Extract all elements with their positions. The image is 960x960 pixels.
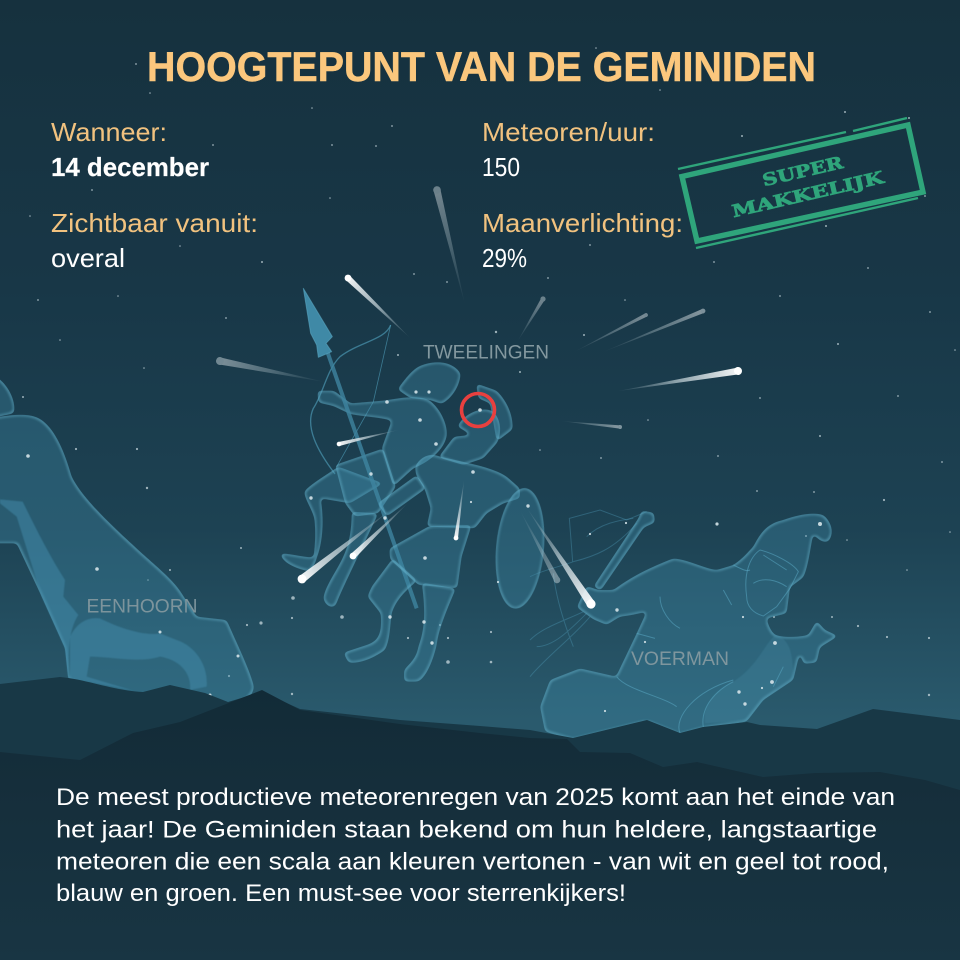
- meteor on right twin: [453, 479, 467, 541]
- stamp text first line: SUPER: [761, 153, 846, 191]
- visible from label: Zichtbaar vanuit:: [51, 208, 258, 238]
- right twin shield: [491, 486, 549, 611]
- visible from value: overal: [51, 243, 125, 273]
- moonlight value: 29%: [482, 243, 527, 273]
- whip outline: [530, 510, 647, 677]
- whip handle: [593, 511, 655, 591]
- fact: when: [51, 117, 209, 182]
- spear: [303, 288, 417, 608]
- right twin: [343, 383, 549, 682]
- description paragraph: [56, 784, 895, 907]
- right twin helmet: [438, 409, 500, 465]
- paragraph line 2: het jaar! De Geminiden staan bekend om hun heldere, langstaartige: [56, 816, 877, 844]
- constellation: Tweelingen: [280, 288, 549, 682]
- charioteer hood and face: [617, 550, 798, 733]
- meteor by shield, faint: [517, 509, 561, 584]
- paragraph line 3: meteoren die een scala aan kleuren vertonen - van wit en geel tot rood,: [56, 848, 889, 876]
- unicorn hind leg bands: [70, 618, 207, 691]
- meteor short on left twin: [336, 428, 399, 447]
- left twin kilt: [335, 448, 396, 517]
- meteor right, faint long: [602, 308, 706, 354]
- right twin crest: [476, 383, 513, 442]
- right twin forward arm: [377, 475, 426, 517]
- meteors: [215, 185, 743, 610]
- right twin torso: [415, 455, 520, 528]
- constellation label: Voerman: VOERMAN: [631, 648, 729, 670]
- meteor lower left large: [296, 507, 393, 585]
- stamp frame: [682, 125, 923, 241]
- stamp double rules: [678, 118, 918, 248]
- right twin front leg: [404, 583, 456, 682]
- constellation: Eenhoorn: [0, 373, 254, 707]
- far mountain ridge: [0, 677, 960, 960]
- constellation stars: [26, 390, 822, 712]
- charioteer leg highlight: [705, 635, 793, 723]
- meteors label: Meteoren/uur:: [482, 117, 655, 147]
- radiant marker circle: [462, 394, 494, 426]
- fact: moonlight: [482, 208, 683, 273]
- meteor right, faint: [573, 312, 649, 354]
- when label: Wanneer:: [51, 117, 167, 147]
- meteor near label, faint: [515, 295, 547, 343]
- left twin torso and arm: [317, 391, 447, 487]
- meteor by shield, bright: [523, 506, 597, 610]
- meteor top centre, faint: [432, 185, 469, 306]
- right twin kilt: [389, 525, 472, 588]
- spear head: [303, 288, 332, 357]
- constellation label: Eenhoorn: EENHOORN: [86, 596, 198, 618]
- difficulty stamp: [678, 118, 923, 248]
- spear shaft: [325, 345, 417, 608]
- right twin back leg: [343, 558, 417, 663]
- meteor small right: [560, 419, 622, 429]
- unicorn body: [0, 415, 254, 707]
- title: HOOGTEPUNT VAN DE GEMINIDEN: [147, 43, 816, 90]
- charioteer body: [540, 514, 838, 740]
- meteor right, bright: [617, 366, 743, 395]
- left twin: [280, 362, 461, 607]
- paragraph line 1: De meest productieve meteorenregen van 2025 komt aan het einde van: [56, 784, 895, 811]
- meteor lower left second: [348, 501, 410, 561]
- constellation: Voerman: [530, 510, 838, 740]
- fact: visible from: [51, 208, 258, 273]
- constellation label: Tweelingen: TWEELINGEN: [423, 342, 549, 364]
- fact: meteors per hour: [482, 117, 655, 182]
- meteor left, faint: [215, 356, 326, 386]
- moonlight label: Maanverlichting:: [482, 208, 683, 238]
- stamp text second line: MAKKELIJK: [730, 168, 887, 222]
- unicorn neck fragment: [0, 373, 14, 418]
- left twin helmet: [397, 362, 461, 404]
- when value: 14 december: [51, 152, 209, 182]
- left twin front leg: [323, 512, 378, 607]
- meteor upper left: [343, 273, 412, 340]
- bow: [311, 325, 391, 474]
- star field: [22, 47, 956, 698]
- near mountain ridge: [0, 690, 960, 960]
- unicorn shaded chest band: [0, 499, 78, 680]
- paragraph line 4: blauw en groen. Een must-see voor sterrenkijkers!: [56, 880, 626, 907]
- meteors value: 150: [482, 152, 520, 182]
- left twin rear leg: [280, 467, 383, 572]
